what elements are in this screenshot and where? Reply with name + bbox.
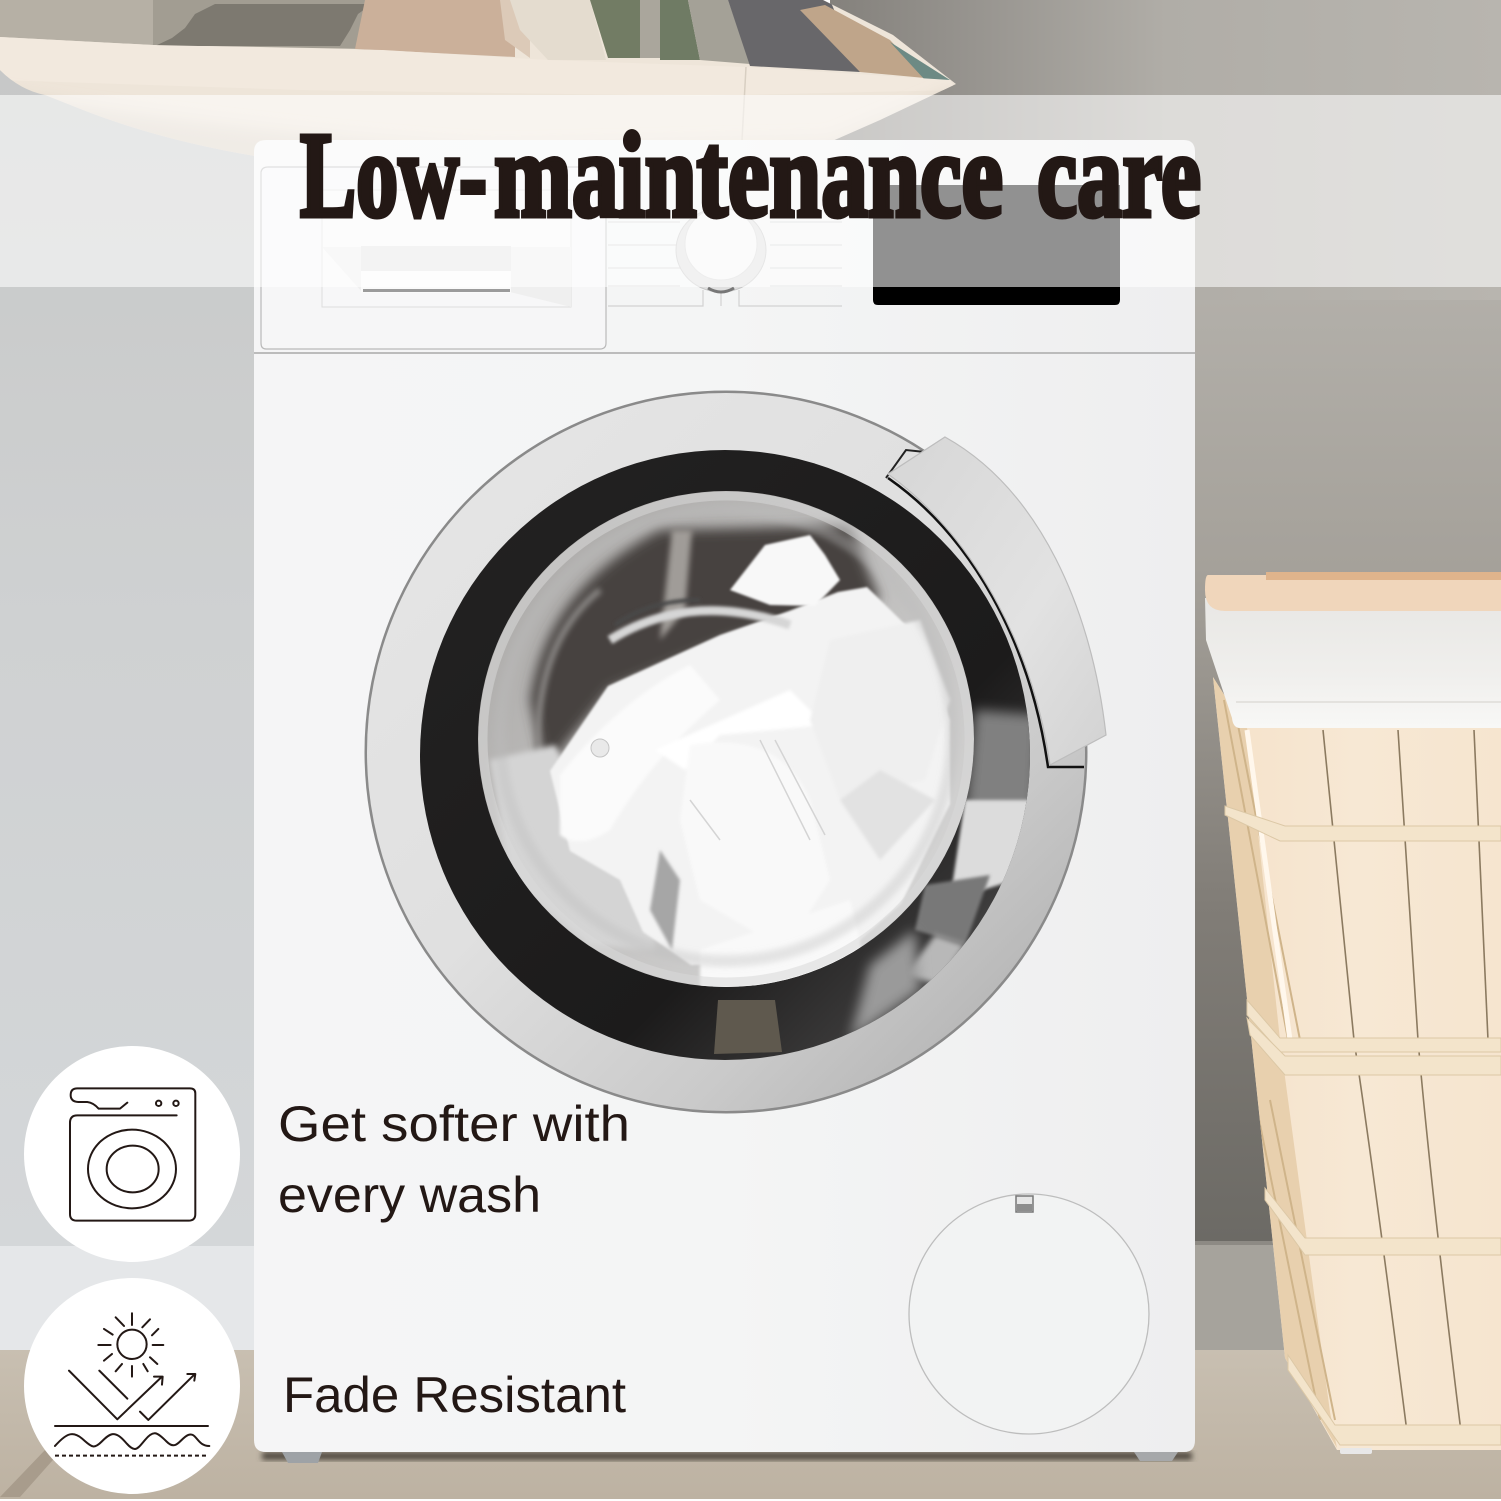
- icon circle: sun protection: [24, 1278, 240, 1494]
- icon circle: washing machine: [24, 1046, 240, 1262]
- laundry basket: [1205, 572, 1501, 1454]
- basket rim: [1205, 575, 1501, 611]
- icon: sun and reflected rays: [55, 1313, 209, 1456]
- door handle: [886, 437, 1106, 767]
- laundry top lump: [730, 535, 840, 606]
- laundry mass: [550, 587, 950, 965]
- drum shadow: [530, 525, 880, 770]
- door shadow: [366, 392, 1086, 1112]
- laundry folds: [560, 600, 950, 990]
- control knob: [676, 208, 766, 292]
- translucent title band: [0, 95, 1501, 287]
- washer door: [366, 392, 1106, 1112]
- control lines: [608, 222, 842, 306]
- text: get softer with every wash: Get softer with: [278, 1096, 630, 1152]
- machine body: [254, 140, 1195, 1452]
- drawer panel: [261, 167, 606, 349]
- chrome reflections: [714, 710, 1040, 1054]
- drum interior and laundry: [490, 525, 950, 990]
- title: maintenance: [494, 108, 1003, 243]
- glass rim: [483, 496, 969, 982]
- icon: washing machine: [70, 1088, 195, 1221]
- basket foot: [1340, 1448, 1372, 1454]
- title: care: [1037, 108, 1201, 243]
- filter hatch: [909, 1194, 1149, 1434]
- machine feet: [282, 1452, 1178, 1463]
- basket slats: [1213, 677, 1488, 1448]
- feature: fade resistant: [24, 1278, 626, 1494]
- washing machine: [254, 140, 1195, 1463]
- door glass: [478, 491, 974, 987]
- text: get softer with every wash: every wash: [278, 1167, 541, 1223]
- display screen: [873, 185, 1120, 305]
- feature: softer with every wash: [24, 1046, 644, 1262]
- basket body: [1213, 677, 1501, 1450]
- lower left shaded cloth: [490, 745, 655, 950]
- door black ring: [420, 450, 1030, 1060]
- detergent dispenser: [322, 190, 571, 307]
- top panel seam: [254, 352, 1195, 354]
- basket cloth liner: [1205, 598, 1501, 728]
- title: Low-: [300, 108, 487, 243]
- door outer ring: [367, 393, 1085, 1111]
- pillow: [0, 0, 956, 170]
- text: fade resistant: Fade Resistant: [283, 1367, 626, 1423]
- basket straps: [1225, 806, 1501, 1445]
